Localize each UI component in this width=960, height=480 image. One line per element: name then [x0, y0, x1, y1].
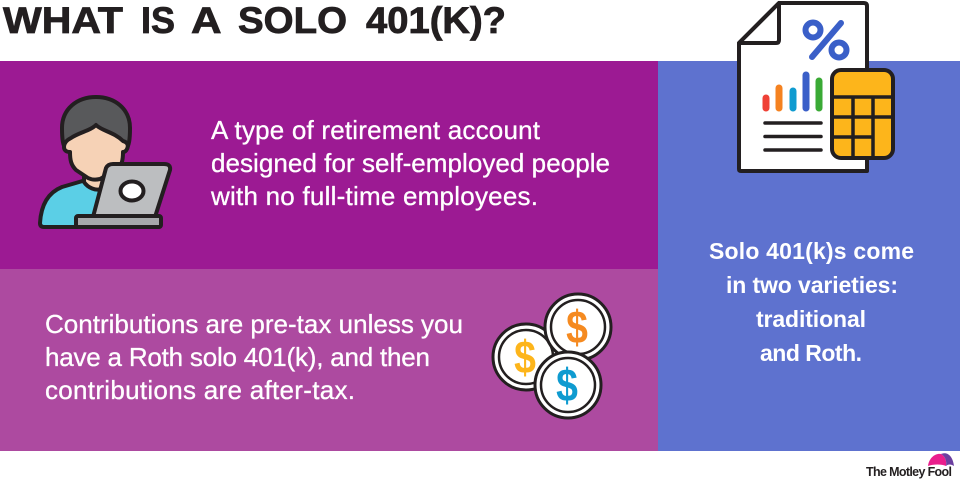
- percent symbol: [806, 22, 846, 58]
- definition text: A type of retirement account: [211, 115, 541, 145]
- icon: coins: $: [566, 302, 588, 354]
- icon: coins: [493, 294, 611, 418]
- definition text: designed for self-employed people: [211, 148, 610, 178]
- title: WHAT: [3, 0, 123, 41]
- logo: The Motley Fool: The Motley Fool: [866, 465, 952, 479]
- title: IS: [141, 0, 175, 41]
- contributions text: contributions are after-tax.: [45, 375, 355, 405]
- icon: coins: $: [556, 360, 578, 412]
- icon: coins: $: [514, 332, 536, 384]
- panel: contributions: [0, 269, 658, 451]
- contributions text: Contributions are pre-tax unless you: [45, 309, 463, 339]
- mini bar chart: [766, 75, 819, 108]
- varieties text: in two varieties:: [726, 272, 898, 298]
- title: SOLO: [238, 0, 347, 41]
- icon: document with calculator: [739, 3, 893, 171]
- panel: definition: [0, 61, 658, 269]
- contributions text: have a Roth solo 401(k), and then: [45, 342, 430, 372]
- title: 401(K)?: [366, 0, 506, 41]
- panel: varieties: [658, 61, 960, 451]
- calculator: [832, 70, 893, 158]
- jester hat: [928, 453, 954, 466]
- varieties text: Solo 401(k)s come: [709, 238, 914, 264]
- document lines: [765, 123, 821, 150]
- definition text: with no full-time employees.: [210, 181, 538, 211]
- varieties text: traditional: [756, 306, 866, 332]
- icon: person at laptop: [40, 97, 170, 227]
- varieties text: and Roth.: [760, 340, 862, 366]
- logo: The Motley Fool: [866, 453, 954, 479]
- title: A: [191, 0, 221, 41]
